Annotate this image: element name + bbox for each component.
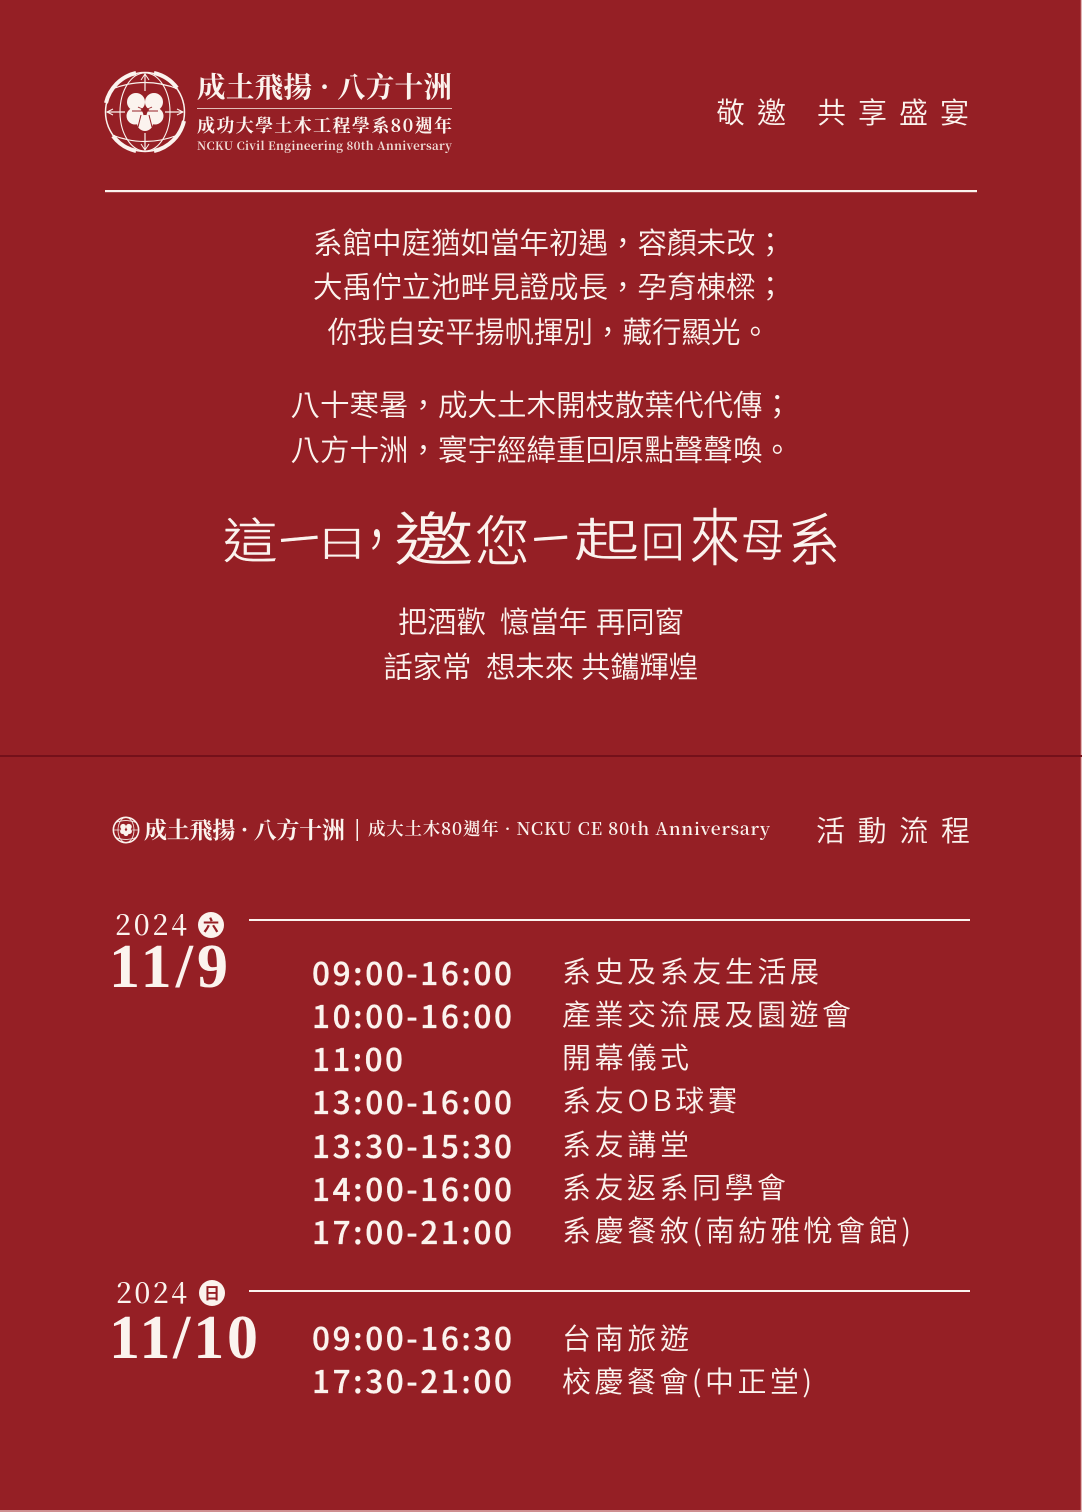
logo english subtitle: NCKU Civil Engineering 80th Anniversary (197, 138, 452, 154)
day two times (312, 1314, 512, 1403)
day one times: 13:30-15:30 (312, 1122, 512, 1168)
banner subtitle: 成大土木80週年 · NCKU CE 80th Anniversary (368, 816, 770, 841)
handwritten invitation line (223, 489, 840, 583)
handwritten invitation line: 您 (475, 498, 530, 577)
day one date: 11/9 (109, 933, 228, 1001)
closing verse: 把酒歡 (398, 600, 486, 642)
logo rule (197, 108, 452, 109)
day two rule (249, 1290, 970, 1292)
invitation heading: 盛 (899, 90, 928, 132)
poem stanza two (290, 382, 792, 470)
day two times: 17:30-21:00 (312, 1357, 512, 1403)
day one events: 開幕儀式 (562, 1035, 689, 1077)
poem stanza one: 大禹佇立池畔見證成長，孕育棟樑； (313, 264, 785, 306)
day one events: 系友返系同學會 (562, 1165, 786, 1207)
invitation heading: 共 (817, 90, 846, 132)
day one weekday badge (198, 912, 224, 938)
day one times: 14:00-16:00 (312, 1165, 512, 1211)
banner title: 成土飛揚 · 八方十洲 (144, 812, 345, 845)
banner separator (356, 819, 358, 841)
poem stanza two: 八十寒暑，成大土木開枝散葉代代傳； (290, 382, 792, 424)
handwritten invitation line: 邀 (394, 494, 473, 577)
closing verse: 再同窗 (596, 600, 684, 642)
day one events: 系友講堂 (562, 1122, 689, 1164)
section: schedule (109, 808, 970, 1403)
header logo (106, 65, 452, 154)
logo title: 成土飛揚 · 八方十洲 (197, 65, 452, 106)
day one events (562, 949, 911, 1250)
poem stanza two: 八方十洲，寰宇經緯重回原點聲聲喚。 (290, 428, 792, 470)
handwritten invitation line: 來 (690, 490, 740, 579)
day two events: 台南旅遊 (562, 1316, 689, 1358)
handwritten invitation line: ， (354, 489, 399, 583)
header divider (105, 190, 977, 192)
day one times: 11:00 (312, 1035, 403, 1081)
poem stanza one: 你我自安平揚帆揮別，藏行顯光。 (328, 310, 770, 352)
handwritten invitation line: 母 (741, 503, 785, 569)
day one weekday badge: 六 (203, 912, 219, 936)
closing verse: 話家常 (384, 644, 471, 686)
day one events: 系慶餐敘(南紡雅悅會館) (562, 1208, 911, 1250)
handwritten invitation line: 一 (276, 499, 322, 575)
day two weekday badge (199, 1280, 225, 1306)
handwritten invitation line: 這 (223, 502, 277, 572)
handwritten invitation line: 回 (641, 510, 685, 570)
schedule header banner (113, 812, 770, 845)
closing verse (384, 600, 698, 686)
day one events: 系友OB球賽 (562, 1078, 737, 1120)
day one year: 2024 (115, 904, 187, 944)
closing verse: 憶當年 (500, 600, 588, 642)
day two (109, 1272, 970, 1403)
handwritten invitation line: 日 (315, 515, 368, 567)
closing verse: 想未來 (486, 644, 574, 686)
day one times: 17:00-21:00 (312, 1208, 512, 1254)
invitation heading: 邀 (757, 90, 786, 132)
day one rule (249, 919, 970, 921)
day two year: 2024 (116, 1272, 187, 1312)
icon: globe and flower emblem (106, 72, 184, 152)
day two times: 09:00-16:30 (312, 1314, 512, 1360)
day two weekday badge: 日 (204, 1280, 220, 1304)
poem stanza one: 系館中庭猶如當年初遇，容顏未改； (313, 220, 785, 262)
logo subtitle: 成功大學土木工程學系80週年 (197, 112, 452, 138)
day one times: 10:00-16:00 (312, 992, 512, 1038)
day one events: 系史及系友生活展 (562, 949, 819, 991)
day one times: 09:00-16:00 (312, 949, 512, 995)
invitation heading: 敬 (716, 90, 745, 132)
day one events: 產業交流展及園遊會 (562, 992, 851, 1034)
fold divider (0, 755, 1082, 757)
section: invitation (105, 65, 977, 686)
handwritten invitation line: 起 (574, 504, 639, 570)
day two events: 校慶餐會(中正堂) (562, 1359, 812, 1401)
day one times: 13:00-16:00 (312, 1078, 512, 1124)
day one (109, 904, 970, 1254)
schedule heading: 活動流程 (816, 808, 970, 850)
day two date: 11/10 (109, 1304, 258, 1372)
handwritten invitation line: 一 (530, 498, 571, 574)
handwritten invitation line: 系 (788, 494, 840, 577)
icon: small emblem (113, 817, 139, 843)
invitation heading: 宴 (940, 90, 969, 132)
day two events (562, 1316, 812, 1401)
day one times (312, 949, 512, 1254)
closing verse: 共鑴輝煌 (581, 644, 698, 686)
invitation heading: 享 (858, 90, 887, 132)
poem stanza one (313, 220, 785, 352)
